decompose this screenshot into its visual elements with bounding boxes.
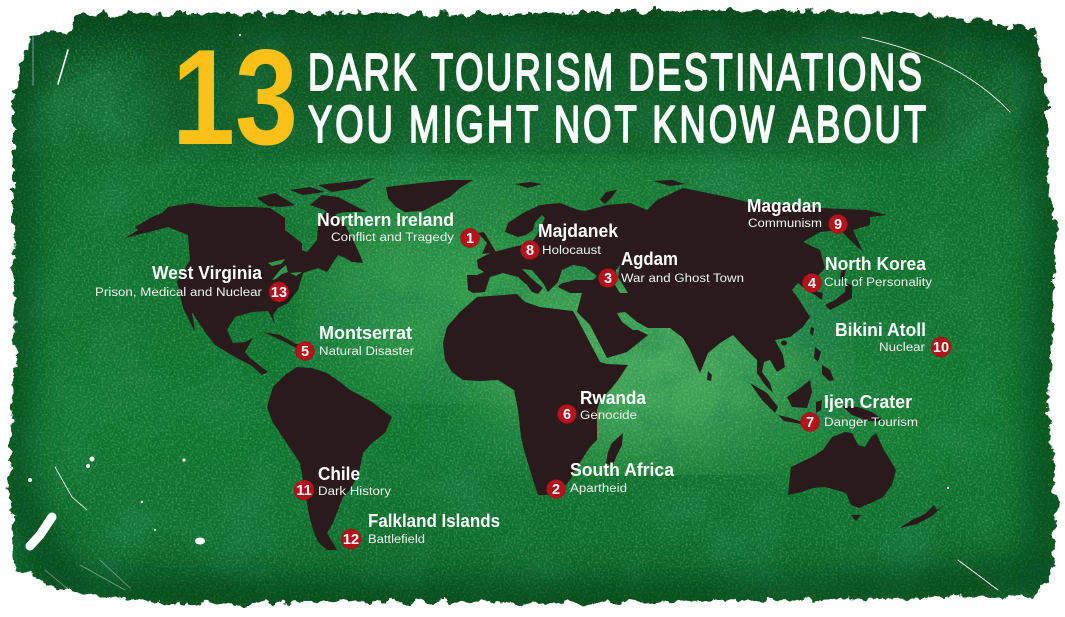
label: 1 Northern Ireland: Conflict and Tragedy — [331, 232, 454, 244]
island: Borneo — [787, 380, 812, 408]
island: Java — [778, 415, 803, 424]
label: 10 Bikini Atoll: Bikini Atoll — [835, 320, 926, 340]
label: 4 North Korea: North Korea — [825, 254, 927, 274]
label: 7 Ijen Crater — [800, 392, 918, 432]
label: 12 Falkland Islands: Falkland Islands — [368, 511, 500, 531]
label: 5 Montserrat — [296, 323, 414, 360]
continent: North America — [125, 203, 363, 375]
label: 13 West Virginia: Prison, Medical and Nuclear — [95, 287, 262, 299]
label: 5 Montserrat: Montserrat — [319, 323, 412, 343]
island: Sakhalin — [840, 268, 846, 282]
label: 6 Rwanda: Rwanda — [580, 388, 647, 408]
islands: Arctic Canada — [257, 178, 375, 215]
label: 13 West Virginia: 13 — [271, 285, 287, 301]
label: 9 Magadan: Communism — [748, 218, 822, 230]
label: 11 Chile — [294, 464, 391, 500]
label: 4 North Korea — [802, 254, 932, 292]
label: 1 Northern Ireland: Northern Ireland — [317, 210, 454, 230]
label: 9 Magadan: 9 — [834, 217, 842, 233]
island: Siberian Arctic — [653, 180, 685, 186]
label: 3 Agdam: 3 — [604, 271, 612, 287]
label: 13 West Virginia: West Virginia — [152, 263, 263, 283]
label: 3 Agdam — [598, 249, 744, 288]
label: 1 Northern Ireland: 1 — [466, 231, 474, 247]
label: 12 Falkland Islands: Battlefield — [368, 534, 425, 546]
continent: South America — [267, 367, 392, 550]
label: 10 Bikini Atoll — [835, 320, 951, 357]
label: 6 Rwanda: 6 — [563, 407, 571, 423]
continent: Australia — [788, 432, 896, 508]
island: Sulawesi — [816, 400, 822, 413]
label: 8 Majdanek: 8 — [526, 243, 534, 259]
island: Tasmania — [851, 515, 861, 521]
label: 13 West Virginia — [95, 263, 289, 302]
island: Taiwan and Hainan — [781, 327, 814, 346]
label: 7 Ijen Crater: 7 — [806, 415, 814, 431]
label: 12 Falkland Islands: 12 — [343, 532, 359, 548]
continent: Eurasia — [467, 188, 887, 393]
island: Greenland — [386, 180, 473, 212]
island: Madagascar — [606, 433, 623, 467]
label: 7 Ijen Crater: Ijen Crater — [824, 392, 912, 412]
title: line one: DARK TOURISM DESTINATIONS — [308, 42, 922, 102]
label: 11 Chile: Chile — [318, 464, 360, 484]
label: 3 Agdam: War and Ghost Town — [621, 273, 744, 285]
label: 12 Falkland Islands — [341, 511, 500, 549]
island: Svalbard — [515, 182, 542, 188]
label: 10 Bikini Atoll: Nuclear — [879, 342, 925, 354]
title: 13: 13 — [172, 21, 298, 173]
label: 11 Chile: 11 — [296, 483, 312, 499]
island: Japan — [825, 283, 852, 310]
label: 4 North Korea: 4 — [808, 276, 816, 292]
label: 9 Magadan: Magadan — [747, 196, 822, 216]
island: Sumatra — [750, 383, 778, 413]
island: Novaya Zemlya — [600, 190, 617, 204]
world map — [125, 178, 944, 550]
island: Sri Lanka — [707, 371, 712, 381]
label: 9 Magadan — [747, 196, 848, 234]
Great Lakes — [268, 259, 302, 280]
label: 2 South Africa — [546, 460, 675, 498]
label: 4 North Korea: Cult of Personality — [824, 277, 932, 289]
label: 5 Montserrat: 5 — [301, 344, 309, 360]
island: New Zealand — [900, 505, 944, 528]
label: 3 Agdam: Agdam — [621, 249, 678, 269]
title: line two: YOU MIGHT NOT KNOW ABOUT — [308, 94, 926, 154]
label: 11 Chile: Dark History — [318, 486, 391, 498]
continent: Africa — [443, 294, 628, 495]
label: 2 South Africa: South Africa — [570, 460, 675, 480]
island: New Guinea — [842, 406, 886, 422]
label: 6 Rwanda — [558, 388, 647, 424]
label: 6 Rwanda: Genocide — [580, 410, 637, 422]
label: 8 Majdanek: Majdanek — [538, 221, 619, 241]
label: 2 South Africa: Apartheid — [570, 483, 627, 495]
label: 1 Northern Ireland — [317, 210, 480, 248]
label: 2 South Africa: 2 — [552, 482, 560, 498]
label: 8 Majdanek — [520, 221, 619, 260]
label: 5 Montserrat: Natural Disaster — [319, 346, 414, 358]
label: 10 Bikini Atoll: 10 — [933, 340, 949, 356]
islands: Philippines — [814, 347, 834, 381]
island: Cuba and Hispaniola — [263, 332, 308, 349]
island: UK — [478, 232, 496, 254]
label: 8 Majdanek: Holocaust — [542, 245, 602, 257]
label: 7 Ijen Crater: Danger Tourism — [824, 417, 918, 429]
